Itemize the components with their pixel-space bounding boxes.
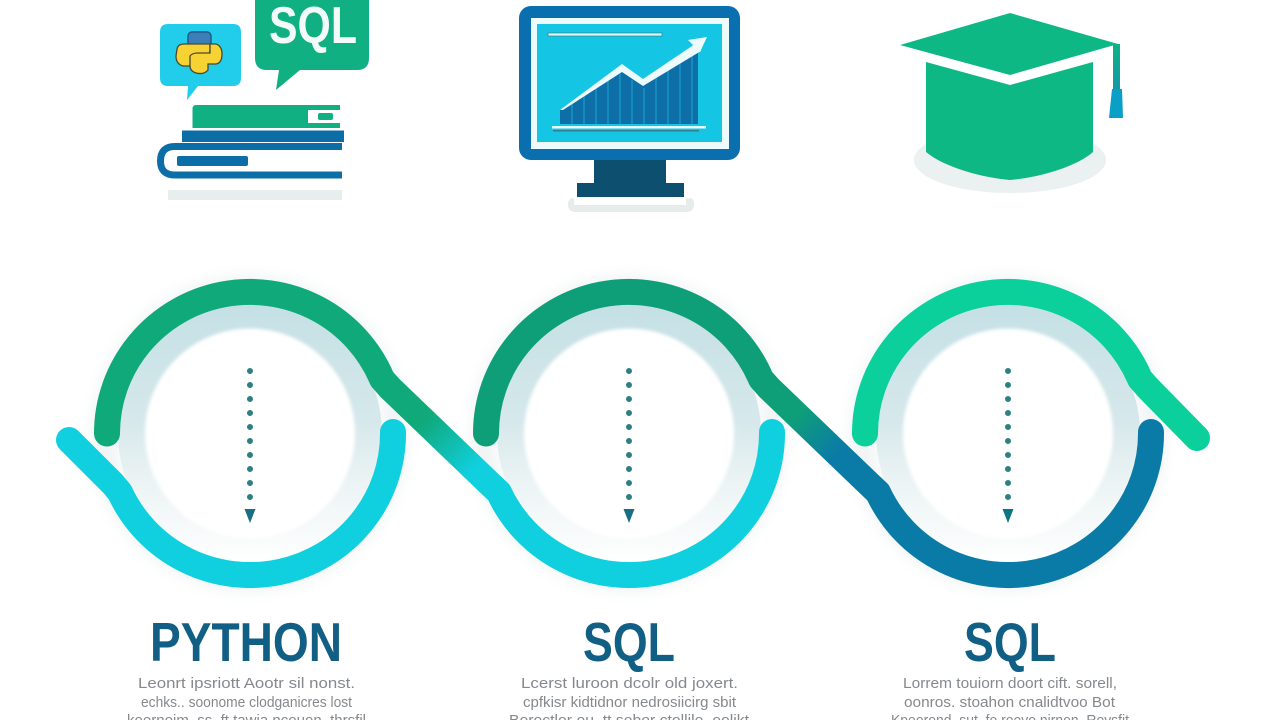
- heading: first sql: SQL: [583, 611, 675, 673]
- monitor base shadow: [568, 198, 694, 212]
- monitor frame: [519, 6, 740, 160]
- icon: graduation cap: [900, 13, 1123, 193]
- arrow: first dotted downward: [244, 371, 256, 523]
- segment: first upper arc to second lower arc: [107, 292, 772, 575]
- heading: second sql: SQL: [964, 611, 1056, 673]
- description: python: echks.. soonome clodganicres lost: [141, 694, 353, 711]
- panel: soft circle backdrops: [104, 288, 1154, 580]
- description: python: Leonrt ipsriott Aootr sil nonst.: [138, 675, 355, 692]
- chart: connected wave path: [69, 292, 1197, 575]
- description: second sql: Lorrem touiorn doort cift. sorell,: [903, 675, 1117, 692]
- description: python: [127, 675, 366, 720]
- segment: left tail and first lower arc: [69, 432, 393, 575]
- segment: second upper arc to third lower arc: [486, 292, 1151, 575]
- icon: python speech bubble: [160, 24, 241, 100]
- description: second sql: oonros. stoahon cnalidtvoo Bot: [904, 694, 1116, 711]
- icon: books with language speech bubbles: [160, 0, 369, 200]
- description: second sql: [891, 675, 1130, 720]
- arrow: third dotted downward: [1002, 371, 1014, 523]
- segment: third upper arc and right tail: [865, 292, 1197, 438]
- text block: first sql column: [509, 611, 750, 720]
- text block: python column: [127, 611, 366, 720]
- description: first sql: [509, 675, 750, 720]
- text block: second sql column: [891, 611, 1130, 720]
- description: first sql: Lcerst luroon dcolr old joxert.: [521, 675, 738, 692]
- icon: book stack: [160, 105, 344, 200]
- heading: python: PYTHON: [150, 611, 342, 673]
- line chart with arrow: [548, 33, 707, 132]
- arrow: second dotted downward: [624, 371, 634, 523]
- monitor stand: [577, 160, 684, 197]
- icon: SQL speech bubble: [255, 0, 369, 90]
- description: first sql: cpfkisr kidtidnor nedrosiicirg sbit: [523, 694, 737, 711]
- icon: computer monitor with growth chart: [519, 6, 740, 212]
